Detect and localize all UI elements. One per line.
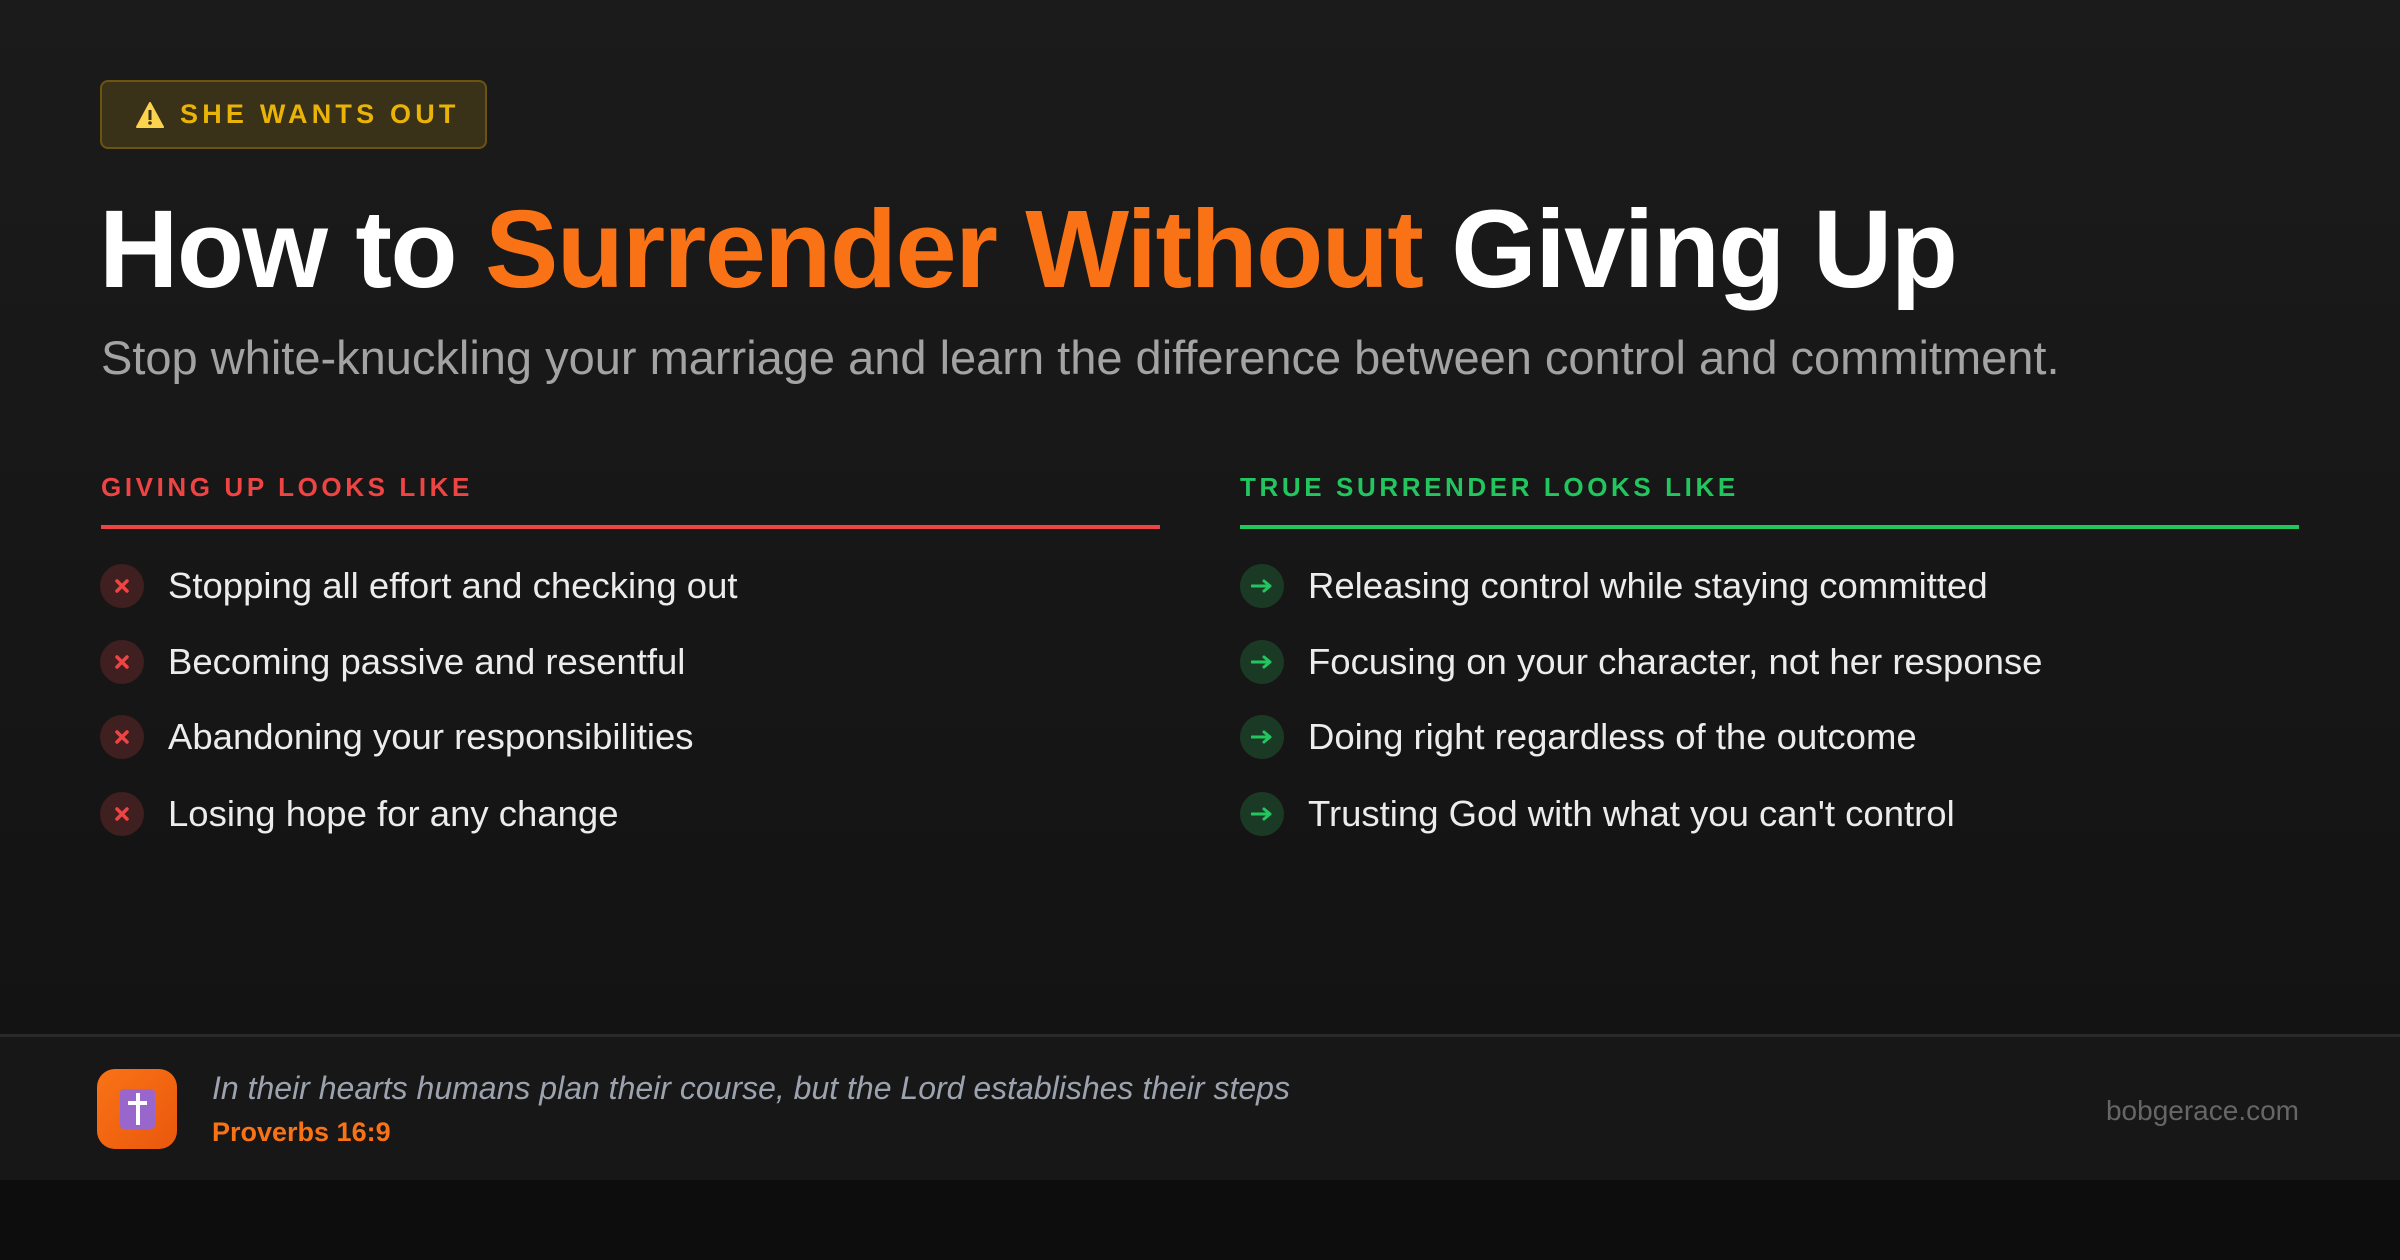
list: surrender items <box>1240 564 2042 836</box>
list: giving up items: Abandoning your responsibilities <box>168 716 694 757</box>
list: giving up items: Losing hope for any change <box>168 793 619 834</box>
list: surrender items: Doing right regardless of the outcome <box>1308 716 1917 757</box>
icon: cross <box>97 1069 177 1149</box>
footer <box>0 1034 2400 1180</box>
panel: giving up <box>100 472 1160 836</box>
list: surrender items: Trusting God with what you can't control <box>1308 793 1955 834</box>
badge: she wants out <box>100 80 487 149</box>
list: giving up items <box>100 564 738 836</box>
title: How to Surrender Without Giving Up <box>99 188 1956 311</box>
heading: giving up looks like: GIVING UP LOOKS LIKE <box>101 472 473 502</box>
site url: bobgerace.com <box>2106 1095 2299 1126</box>
quote text: In their hearts humans plan their course, but the Lord establishes their steps <box>212 1070 1290 1106</box>
list: surrender items: Focusing on your character, not her response <box>1308 641 2042 682</box>
panel: true surrender <box>1240 472 2299 836</box>
heading: true surrender looks like: TRUE SURRENDER LOOKS LIKE <box>1240 472 1739 502</box>
badge: she wants out: SHE WANTS OUT <box>180 99 460 129</box>
quote reference: Proverbs 16:9 <box>212 1117 391 1147</box>
list: surrender items: Releasing control while staying committed <box>1308 565 1988 606</box>
list: giving up items: Stopping all effort and checking out <box>168 565 738 606</box>
list: giving up items: Becoming passive and resentful <box>168 641 685 682</box>
subtitle: Stop white-knuckling your marriage and learn the difference between control and commitment. <box>101 331 2060 384</box>
